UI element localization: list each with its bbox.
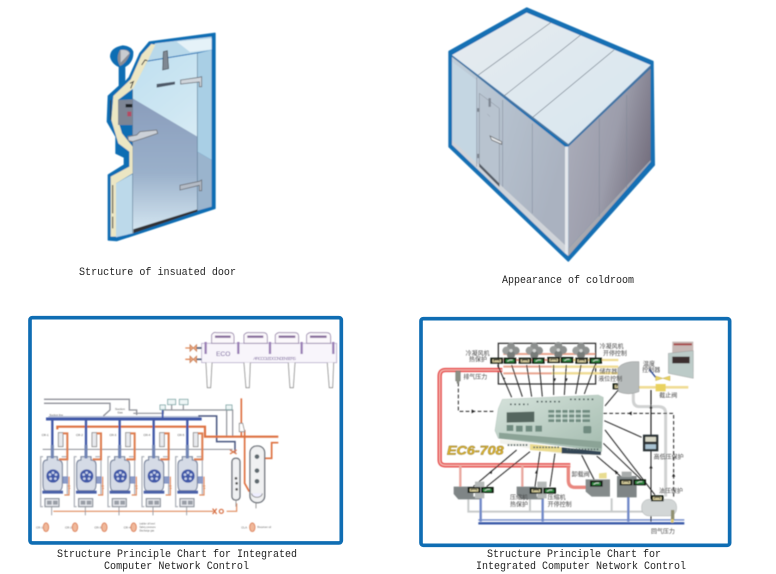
controller unit <box>495 395 603 455</box>
legend symbols: CR-2 <box>65 525 72 529</box>
pipe labels: CR-4 <box>143 433 151 437</box>
chinese labels: 开停控制 <box>603 349 627 357</box>
liquid receiver vessel <box>239 423 265 508</box>
high low pressure switch <box>643 435 658 451</box>
model label: EC6-708 <box>447 443 504 457</box>
chinese labels: 温度 <box>643 360 655 368</box>
oil separator vessel <box>230 450 240 507</box>
coldroom blue outline <box>449 8 654 261</box>
chinese labels: 冷凝风机 <box>466 349 490 357</box>
left wall <box>452 57 565 253</box>
corner post <box>565 147 568 256</box>
roof and wall seams <box>452 23 651 145</box>
panel: compressor rack chart <box>30 318 341 543</box>
caption: coldroom: Appearance of coldroom <box>502 275 634 287</box>
legend symbols <box>36 523 272 532</box>
fan switches <box>490 357 602 364</box>
chart drawing <box>440 342 693 535</box>
chinese labels: 高低压保护 <box>654 453 684 461</box>
upper hardware <box>157 82 175 88</box>
door handle <box>128 130 158 142</box>
door top lintel <box>147 37 212 61</box>
legend symbols: Receiver oil <box>257 525 272 529</box>
air cooled condenser: ECO <box>216 351 230 358</box>
signal arrows <box>473 365 655 495</box>
chinese labels: 液位控制 <box>598 375 622 383</box>
pipe labels: Suction line <box>49 413 64 417</box>
temperature controller <box>649 342 693 391</box>
lower compressors <box>454 472 677 523</box>
air cooled condenser <box>185 332 337 388</box>
legend symbols: CR-1 <box>36 525 43 529</box>
roof <box>452 13 651 144</box>
chinese labels: 卸载阀 <box>572 471 590 479</box>
chinese labels: 排气压力 <box>463 373 487 381</box>
legend symbols: Ladder oil level <box>139 523 155 526</box>
outer side wall <box>116 174 133 237</box>
chinese labels: 热保护 <box>469 356 487 364</box>
legend symbols: CR-3 <box>94 525 102 529</box>
door leaf <box>133 53 197 233</box>
door blue outline <box>107 33 215 241</box>
chinese labels <box>463 343 684 535</box>
chinese labels: 控制器 <box>642 366 660 374</box>
caption: compressor chart: Computer Network Control <box>104 561 249 573</box>
pipe labels: Suction <box>115 407 125 411</box>
receiver tank <box>618 362 639 394</box>
chinese labels: 开停控制 <box>548 500 572 508</box>
chinese labels: 压缩机 <box>548 494 566 502</box>
caption: controller chart: Integrated Computer Network Control <box>476 561 686 573</box>
panel: insulated door illustration <box>107 33 215 241</box>
caption: compressor chart <box>57 549 297 573</box>
fans <box>502 342 590 359</box>
instrument boxes <box>160 399 232 410</box>
discharge pressure sensor <box>456 371 460 383</box>
gas and suction pipework <box>43 398 278 511</box>
pipe labels <box>42 407 185 437</box>
door hinge icon <box>118 50 130 66</box>
chinese labels: 回气压力 <box>651 527 675 535</box>
panel: coldroom appearance <box>449 8 654 261</box>
base strip <box>452 140 565 253</box>
caption: controller chart: Structure Principle Chart for <box>487 549 661 561</box>
chinese labels: 截止阀 <box>659 392 677 400</box>
liquid line valves <box>213 509 223 514</box>
right wall <box>568 68 651 248</box>
door leaf shadow <box>133 98 197 233</box>
cold room door <box>479 93 499 187</box>
pipe labels: CR-5 <box>177 433 185 437</box>
legend symbols: CR-4 <box>124 525 131 529</box>
panel: EC6-708 controller chart <box>421 319 730 545</box>
dashed control lines <box>458 383 674 497</box>
compressor units <box>41 420 205 515</box>
lower switches <box>468 383 664 501</box>
display screen <box>507 412 534 423</box>
arrow heads <box>472 377 675 477</box>
chinese labels: 冷凝风机 <box>600 343 624 351</box>
chart frame <box>421 319 730 545</box>
chinese labels: 热保护 <box>510 500 528 508</box>
caption: insulated door: Structure of insuated door <box>79 267 236 279</box>
chinese labels: 储存器 <box>599 367 617 375</box>
terminals <box>510 399 595 404</box>
legend symbols: Discharge gas <box>139 529 155 532</box>
air cooled condenser: AIR COOLED CONDENSERS <box>253 356 296 361</box>
chart drawing <box>36 332 337 532</box>
door bottom seal <box>133 209 197 233</box>
pipe labels: CR-2 <box>76 433 83 437</box>
buttons <box>507 425 591 433</box>
caption: controller chart <box>476 549 686 573</box>
lower hinge <box>180 180 202 191</box>
caption: compressor chart: Structure Principle Chart for Integrated <box>57 549 297 561</box>
legend symbols: CLA <box>241 525 247 529</box>
pipe labels: Gas <box>117 410 123 414</box>
door hardware <box>490 136 502 144</box>
condenser coil and pipes <box>440 343 688 523</box>
pipe labels: CR-1 <box>42 433 49 437</box>
chinese labels: 油压保护 <box>659 487 683 495</box>
legend symbols: Safety pressure <box>139 526 156 529</box>
insulated wall core <box>111 44 155 237</box>
pipe labels: CR-3 <box>109 433 117 437</box>
control box <box>118 99 133 125</box>
chinese labels: 压缩机 <box>510 494 528 502</box>
chart frame <box>30 318 341 543</box>
right door frame <box>197 50 212 160</box>
indicator grid <box>548 410 590 422</box>
